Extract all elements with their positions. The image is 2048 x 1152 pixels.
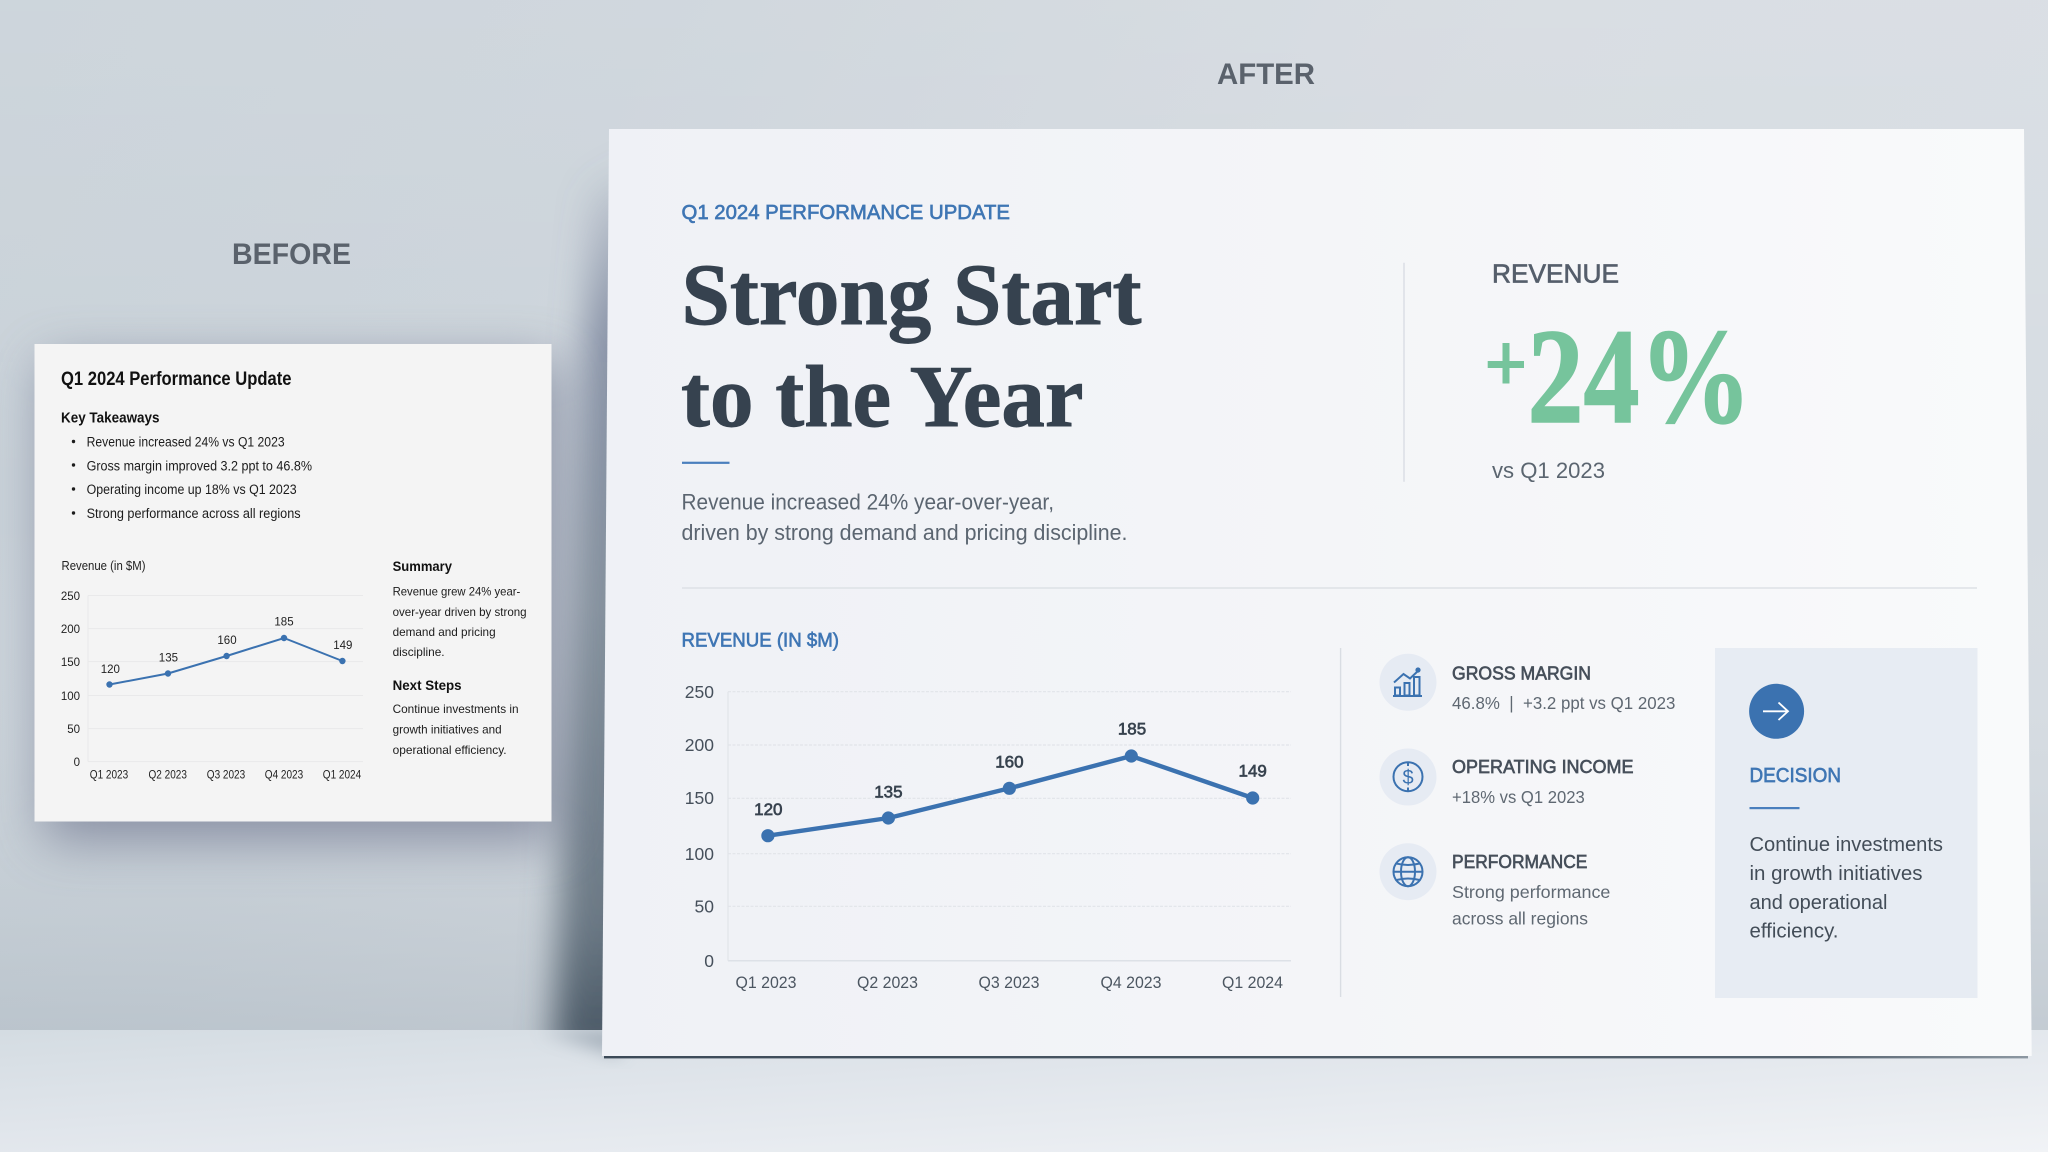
before next steps: Continue investments in bbox=[393, 702, 519, 716]
line chart: revenue: 50 bbox=[695, 896, 714, 916]
line chart: revenue: 149 bbox=[1239, 762, 1267, 780]
panel: decision: and operational bbox=[1750, 892, 1888, 914]
metric: performance: across all regions bbox=[1452, 908, 1588, 928]
line chart: revenue bbox=[685, 682, 1291, 992]
kpi value: 24% bbox=[1528, 302, 1752, 452]
before summary: over-year driven by strong bbox=[393, 605, 527, 619]
subtitle: driven by strong demand and pricing discipline. bbox=[682, 520, 1128, 545]
revenue kpi bbox=[1488, 259, 1752, 483]
line chart: revenue: 185 bbox=[1118, 720, 1146, 738]
chart heading: REVENUE (IN $M) bbox=[682, 630, 839, 652]
line chart: revenue: 0 bbox=[704, 951, 714, 971]
line chart: revenue: 160 bbox=[995, 752, 1024, 772]
subtitle bbox=[682, 489, 1128, 545]
line chart: revenue: 100 bbox=[685, 844, 714, 864]
icon: dollar coin bbox=[1394, 762, 1422, 791]
before summary: Revenue grew 24% year- bbox=[393, 584, 520, 598]
subtitle: Revenue increased 24% year-over-year, bbox=[682, 489, 1054, 514]
panel: decision bbox=[1715, 648, 1978, 998]
line chart: revenue: 150 bbox=[685, 788, 714, 808]
line chart: revenue: Q1 2023 bbox=[736, 973, 796, 992]
before next steps: Next Steps bbox=[393, 677, 462, 693]
line chart: revenue: 135 bbox=[874, 782, 903, 802]
metric: gross margin: 46.8% | +3.2 ppt vs Q1 2023 bbox=[1452, 693, 1675, 713]
headline: Strong Start bbox=[682, 247, 1142, 344]
before chart: 50 bbox=[67, 724, 80, 736]
icon: arrow in circle bbox=[1749, 684, 1804, 739]
headline bbox=[681, 247, 1142, 446]
line chart: revenue: Q1 2024 bbox=[1222, 973, 1283, 992]
panel: decision: DECISION bbox=[1750, 764, 1841, 787]
before next steps: growth initiatives and bbox=[393, 722, 502, 736]
panel: before slide shadow bbox=[44, 362, 558, 840]
eyebrow: Q1 2024 PERFORMANCE UPDATE bbox=[682, 201, 1010, 224]
metric: operating income: +18% vs Q1 2023 bbox=[1452, 787, 1585, 807]
before key takeaways bbox=[61, 410, 312, 521]
before summary: demand and pricing bbox=[393, 625, 496, 639]
panel: after slide bbox=[602, 129, 2032, 1058]
metric: performance bbox=[1380, 843, 1610, 928]
panel: decision: in growth initiatives bbox=[1750, 863, 1922, 885]
before chart: 0 bbox=[74, 757, 80, 769]
before summary bbox=[393, 558, 527, 659]
icon: globe bbox=[1394, 857, 1422, 886]
before chart: Q1 2024 bbox=[323, 769, 362, 781]
before chart: 160 bbox=[217, 635, 237, 647]
metric: performance: PERFORMANCE bbox=[1452, 851, 1587, 872]
line chart: revenue: Q3 2023 bbox=[978, 973, 1040, 992]
metric: gross margin: GROSS MARGIN bbox=[1452, 662, 1591, 684]
before chart: 149 bbox=[333, 640, 352, 652]
before chart: 135 bbox=[159, 652, 178, 664]
before key takeaways: Strong performance across all regions bbox=[87, 506, 301, 521]
horizontal divider bbox=[682, 587, 1977, 589]
metric: operating income: OPERATING INCOME bbox=[1452, 756, 1634, 777]
before chart: 120 bbox=[101, 664, 120, 676]
before summary: discipline. bbox=[393, 645, 445, 659]
line chart: revenue: Q2 2023 bbox=[857, 973, 918, 992]
metric: gross margin bbox=[1380, 654, 1675, 713]
before summary: Summary bbox=[393, 558, 452, 574]
line chart: revenue: 250 bbox=[685, 682, 714, 702]
background floor bbox=[0, 1030, 2048, 1152]
revenue kpi: vs Q1 2023 bbox=[1492, 458, 1605, 483]
before title: Q1 2024 Performance Update bbox=[61, 369, 292, 390]
before chart: 100 bbox=[61, 691, 80, 703]
before chart bbox=[61, 559, 363, 781]
accent rule bbox=[682, 462, 730, 464]
before next steps bbox=[393, 677, 519, 757]
before chart: 150 bbox=[61, 657, 80, 669]
before key takeaways: Revenue increased 24% vs Q1 2023 bbox=[87, 434, 285, 450]
before chart: 250 bbox=[61, 591, 80, 603]
before key takeaways: Gross margin improved 3.2 ppt to 46.8% bbox=[87, 458, 312, 474]
line chart: revenue: 200 bbox=[685, 735, 714, 755]
label: BEFORE: BEFORE bbox=[232, 238, 351, 271]
before key takeaways: Key Takeaways bbox=[61, 410, 160, 426]
metric: operating income bbox=[1380, 748, 1634, 807]
before chart: Revenue (in $M) bbox=[62, 559, 146, 573]
before next steps: operational efficiency. bbox=[393, 743, 507, 757]
before chart: 185 bbox=[274, 617, 294, 629]
before chart: Q4 2023 bbox=[265, 769, 303, 781]
before chart: Q2 2023 bbox=[148, 769, 187, 781]
panel: decision: efficiency. bbox=[1750, 921, 1838, 943]
line chart: revenue: Q4 2023 bbox=[1100, 973, 1162, 992]
headline: to the Year bbox=[681, 349, 1084, 446]
shadow of after slide on wall and floor bbox=[530, 182, 620, 1061]
panel: decision: Continue investments bbox=[1750, 834, 1943, 856]
before chart: Q1 2023 bbox=[90, 769, 128, 781]
label: AFTER: AFTER bbox=[1217, 58, 1315, 91]
panel: before slide bbox=[34, 344, 552, 822]
icon: bar chart with trend bbox=[1393, 667, 1422, 696]
before key takeaways: Operating income up 18% vs Q1 2023 bbox=[87, 482, 297, 497]
line chart: revenue: 120 bbox=[754, 800, 782, 819]
vertical divider between chart and metrics bbox=[1340, 648, 1342, 997]
before chart: Q3 2023 bbox=[207, 769, 245, 781]
metric: performance: Strong performance bbox=[1452, 882, 1610, 902]
icon: dollar coin: $ bbox=[1402, 767, 1414, 789]
vertical divider bbox=[1403, 263, 1405, 482]
before chart: 200 bbox=[61, 624, 80, 636]
revenue kpi: REVENUE bbox=[1492, 259, 1619, 289]
